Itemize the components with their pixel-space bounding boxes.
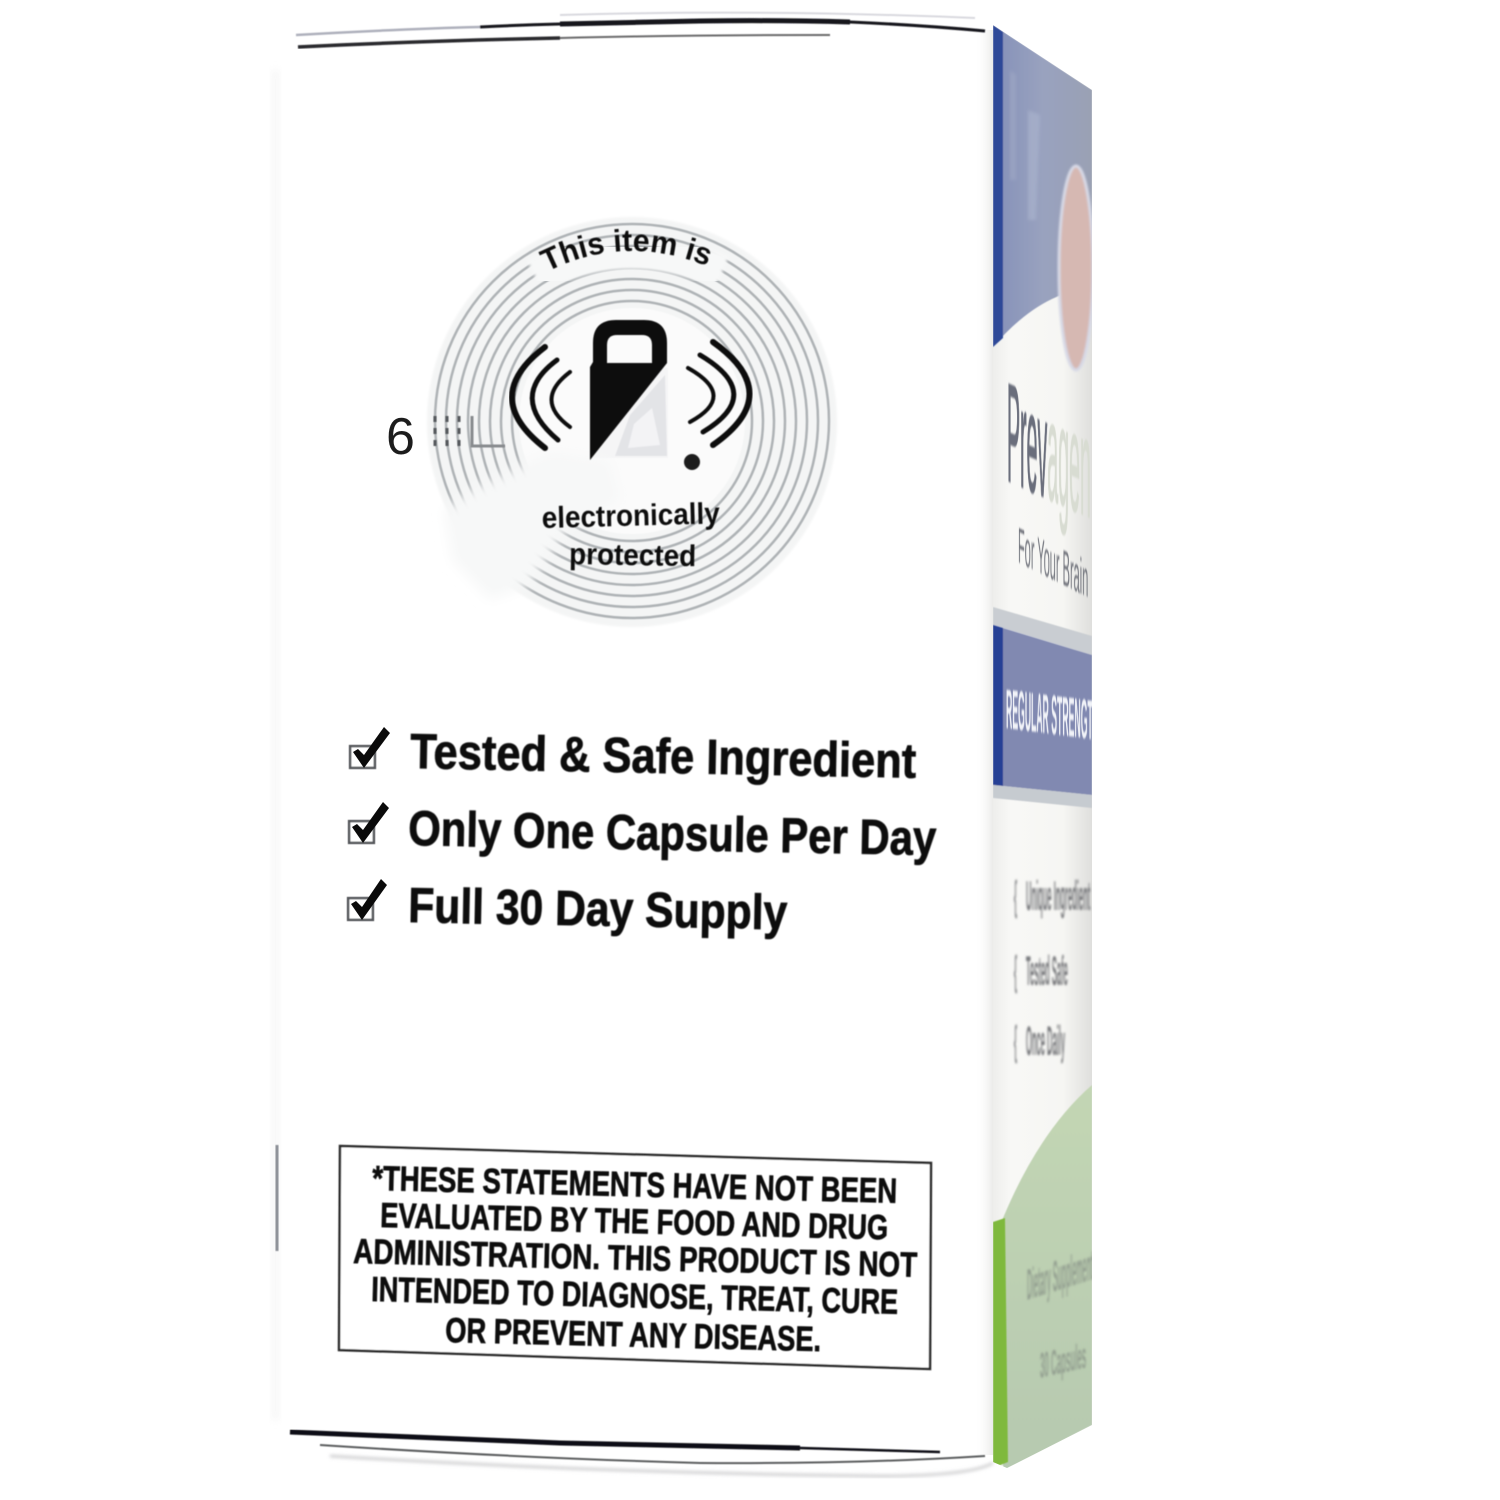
panel: box front face xyxy=(272,28,993,1456)
tagline: For Your Brain xyxy=(1018,517,1088,608)
benefit list xyxy=(1014,874,1090,1065)
box bottom edge lines xyxy=(290,1432,993,1476)
disclaimer text: INTENDED TO DIAGNOSE, TREAT, CURE xyxy=(371,1270,899,1322)
panel: adjacent box side (front of package, seen in perspective) xyxy=(993,20,1099,1480)
benefit list: Once Daily xyxy=(1026,1019,1065,1065)
item: thirty day supply: Full 30 Day Supply xyxy=(408,879,788,940)
supplement label xyxy=(1026,1252,1092,1380)
blue header with wave xyxy=(993,25,1092,347)
sticker disc xyxy=(427,217,837,627)
brand name: Prevagen xyxy=(1007,354,1091,549)
pink circle photo xyxy=(1059,166,1093,370)
item: tested and safe: Tested & Safe Ingredient xyxy=(410,725,917,789)
grey strip above strength band xyxy=(993,607,1092,655)
supplement label: 30 Capsules xyxy=(1040,1334,1086,1386)
disclaimer text: OR PREVENT ANY DISEASE. xyxy=(445,1311,822,1359)
padlock icon xyxy=(590,320,667,460)
sticker: electronic protection xyxy=(386,218,836,626)
disclaimer text: *THESE STATEMENTS HAVE NOT BEEN xyxy=(372,1159,898,1211)
item: one capsule per day: Only One Capsule Per Day xyxy=(408,802,937,866)
benefit list: Tested Safe xyxy=(1026,949,1068,995)
benefit list: { xyxy=(1014,949,1017,995)
disclaimer box xyxy=(339,1146,931,1369)
benefit list: { xyxy=(1014,1019,1017,1065)
stray digit: 6 xyxy=(386,408,415,466)
dashed barcode remnant xyxy=(435,416,505,452)
box top edge lines xyxy=(296,13,985,47)
green footer curve xyxy=(1003,1085,1092,1472)
benefit list: { xyxy=(1014,874,1017,920)
benefit list: Unique Ingredient xyxy=(1026,874,1090,920)
security chip xyxy=(590,368,668,458)
supplement label: Dietary Supplement xyxy=(1027,1239,1093,1310)
disclaimer text: ADMINISTRATION. THIS PRODUCT IS NOT xyxy=(353,1232,918,1285)
product box illustration xyxy=(275,11,1092,1478)
signal arcs right xyxy=(688,342,750,445)
disclaimer text xyxy=(353,1159,918,1359)
strength band xyxy=(993,625,1092,808)
dot xyxy=(684,454,700,470)
disclaimer text: EVALUATED BY THE FOOD AND DRUG xyxy=(380,1196,889,1247)
green edge strip xyxy=(993,1218,1008,1468)
sticker lower text xyxy=(541,497,720,573)
signal arcs left xyxy=(512,347,570,448)
sticker top text: This item is xyxy=(538,228,711,270)
antenna rings xyxy=(435,224,829,618)
halo behind top text xyxy=(535,252,722,276)
benefits checklist xyxy=(348,725,937,940)
sticker centre xyxy=(519,308,745,534)
sticker lower text: protected xyxy=(569,538,696,573)
glue patch over the lower-left rings xyxy=(444,452,620,600)
sticker lower text: electronically xyxy=(541,497,720,535)
strength label: REGULAR STRENGTH xyxy=(1006,679,1099,753)
